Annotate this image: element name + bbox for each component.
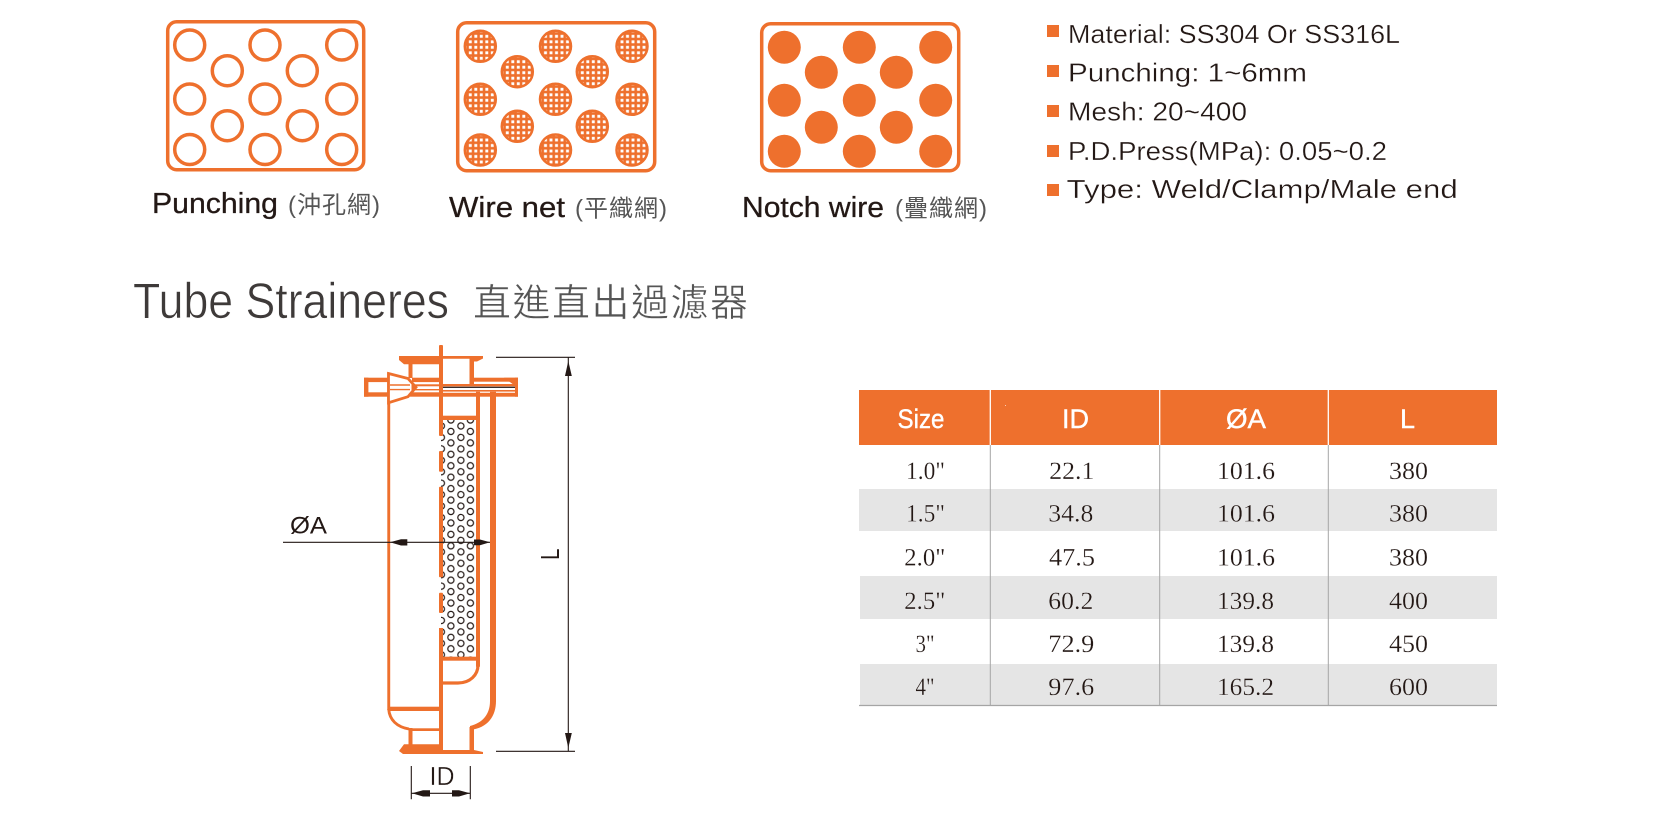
dimension: diameter A — [283, 512, 490, 546]
row 1.0 inch: 101.6 — [1217, 458, 1275, 485]
row 3 inch: 450 — [1389, 631, 1428, 658]
label: punching: Punching — [152, 188, 278, 220]
lower necks — [408, 728, 412, 745]
dimension: inner diameter ID: ID — [430, 761, 454, 791]
row 2.5 inch: 2.5" — [904, 588, 945, 615]
dimension: overall length L: L — [535, 548, 565, 560]
heading: tube strainers — [133, 273, 748, 329]
row 3 inch: 72.9 — [1048, 631, 1094, 658]
heading: tube strainers: 直進直出過濾器 — [473, 283, 748, 325]
row 1.0 inch: 380 — [1389, 458, 1428, 485]
row 1.5 inch: 101.6 — [1217, 501, 1275, 528]
table header: ID — [1062, 404, 1089, 434]
outer walls — [387, 373, 390, 710]
strainer end bars — [443, 416, 476, 420]
dimension: inner diameter ID — [411, 761, 470, 799]
row 4 inch: 97.6 — [1048, 674, 1094, 701]
row 3 inch: 139.8 — [1217, 631, 1274, 658]
wing nut clamp — [388, 374, 416, 403]
row 1.5 inch — [906, 501, 1428, 528]
diagram: tube strainer cross section — [364, 345, 518, 754]
row 2.0 inch: 47.5 — [1049, 545, 1095, 572]
label: wire net: Wire net — [449, 192, 565, 224]
table header: L — [1400, 404, 1415, 434]
upper necks — [408, 364, 412, 378]
spec: pressure: P.D.Press(MPa): 0.05~0.2 — [1068, 136, 1387, 166]
label: notch wire chinese: (疊織網) — [895, 196, 987, 222]
row 1.5 inch: 1.5" — [906, 501, 945, 528]
row 1.0 inch — [906, 458, 1428, 485]
table stripes and rules — [859, 445, 1497, 706]
spec: mesh: Mesh: 20~400 — [1068, 96, 1247, 126]
row 2.0 inch: 380 — [1389, 545, 1428, 572]
spec: punching: Punching: 1~6mm — [1068, 58, 1307, 88]
row 4 inch: 165.2 — [1217, 674, 1274, 701]
label: wire net chinese: (平織網) — [575, 196, 667, 222]
perforated strainer element — [441, 420, 476, 657]
curved shoulders — [389, 665, 478, 729]
panel: notch wire sample — [742, 24, 987, 224]
icon: punching plate — [168, 22, 364, 170]
table header: Size — [898, 404, 944, 434]
table header: ØA — [1226, 404, 1266, 434]
right shoulder — [470, 701, 496, 730]
panel: punching mesh sample — [152, 22, 380, 220]
row 2.0 inch — [904, 545, 1428, 572]
panel: wire net sample — [449, 23, 667, 224]
centre line segments — [439, 345, 443, 436]
bottom flange — [399, 744, 483, 754]
row 4 inch: 4" — [916, 674, 934, 701]
top flange — [399, 356, 483, 364]
row 4 inch — [916, 674, 1428, 701]
row 2.5 inch — [904, 588, 1428, 615]
icon: notch wire plate — [762, 24, 959, 171]
spec: material: Material: SS304 Or SS316L — [1068, 19, 1400, 49]
row 2.0 inch: 101.6 — [1217, 545, 1275, 572]
clamp bars right — [473, 378, 518, 382]
row 1.0 inch: 1.0" — [906, 458, 945, 485]
clamp bars left — [364, 378, 388, 382]
icon: wire net plate — [458, 23, 655, 171]
clamp centre line — [443, 387, 515, 388]
row 3 inch: 3" — [916, 631, 934, 658]
heading: tube strainers: Tube Straineres — [133, 273, 449, 329]
table header — [859, 390, 1497, 445]
label: notch wire: Notch wire — [742, 192, 884, 224]
table: dimensions — [859, 390, 1497, 706]
strainer inner wall — [476, 392, 480, 667]
row 4 inch: 600 — [1389, 674, 1428, 701]
row 1.5 inch: 380 — [1389, 501, 1428, 528]
row 1.5 inch: 34.8 — [1048, 501, 1093, 528]
label: punching chinese: (沖孔網) — [288, 192, 380, 219]
row 2.0 inch: 2.0" — [904, 545, 945, 572]
spec: type: Type: Weld/Clamp/Male end — [1067, 174, 1458, 204]
strainer body — [364, 345, 518, 754]
dimension: overall length L — [496, 357, 575, 752]
row 2.5 inch: 60.2 — [1048, 588, 1093, 615]
row 2.5 inch: 139.8 — [1217, 588, 1274, 615]
dimension: diameter A: ØA — [290, 512, 327, 540]
panel: specification list — [1047, 19, 1458, 204]
row 3 inch — [916, 631, 1428, 658]
row 2.5 inch: 400 — [1389, 588, 1428, 615]
row 1.0 inch: 22.1 — [1049, 458, 1094, 485]
